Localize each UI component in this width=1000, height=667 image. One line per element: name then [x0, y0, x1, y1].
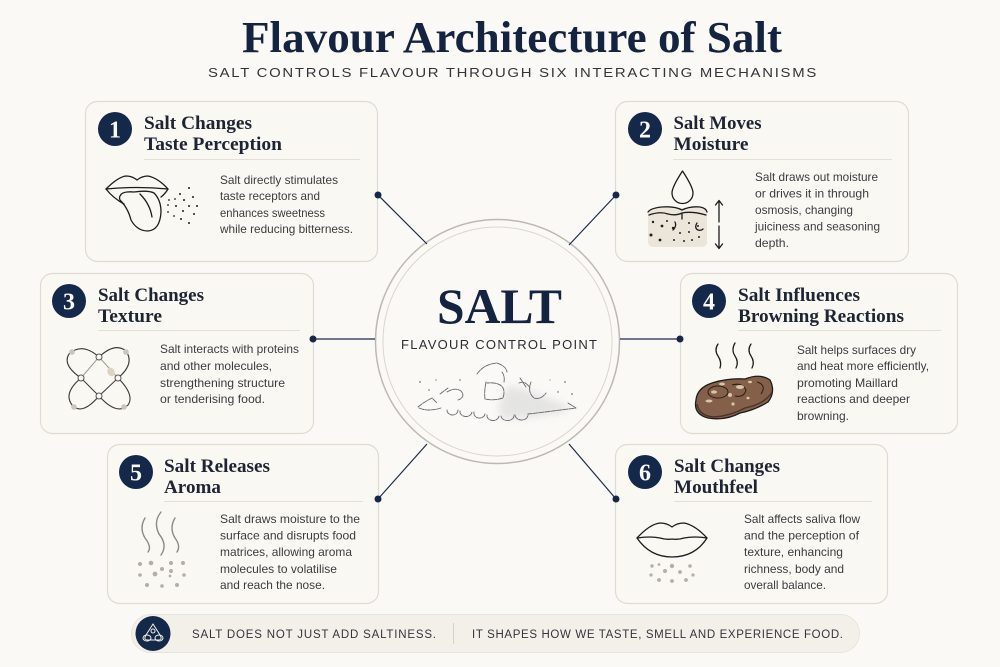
panel: 4 Salt Influences Browning Reactions [680, 274, 958, 434]
heading 1 [144, 114, 283, 155]
icon: protein network [67, 348, 130, 410]
body text 2: or drives it in through [755, 186, 869, 200]
body text 4: Salt helps surfaces dry [797, 343, 916, 357]
body text 4: promoting Maillard [797, 376, 898, 390]
body text 5: surface and disrupts food [220, 528, 356, 542]
body text 2 [754, 170, 880, 250]
body text 1: Salt directly stimulates [220, 173, 338, 187]
body text 5: molecules to volatilise [220, 562, 337, 576]
footer message left: SALT DOES NOT JUST ADD SALTINESS. [192, 629, 436, 641]
body text 3: strengthening structure [160, 376, 285, 390]
body text 6: Salt affects saliva flow [744, 512, 860, 526]
icon: tongue and salt [106, 176, 198, 231]
icon: salt pile [418, 363, 576, 421]
panel: 1 Salt Changes Taste Perception [86, 102, 378, 262]
heading 4: Browning Reactions [738, 307, 904, 327]
number badge 6: 6 [639, 460, 651, 486]
body text 2: osmosis, changing [755, 203, 853, 217]
connector: card 6 to hub [569, 444, 620, 502]
heading 6: Mouthfeel [674, 478, 758, 498]
number badge 2 [628, 112, 662, 146]
body text 2: depth. [755, 236, 789, 250]
number badge 5 [119, 455, 153, 489]
body text 3: and other molecules, [160, 359, 272, 373]
heading 3 [98, 286, 204, 327]
hub heading: SALT [437, 278, 562, 334]
body text 2: Salt draws out moisture [755, 170, 878, 184]
hub caption: FLAVOUR CONTROL POINT [401, 337, 597, 352]
number badge 1: 1 [109, 118, 121, 144]
icon: browned steak with steam [696, 343, 773, 419]
body text 3 [160, 342, 299, 406]
icon: water drop on food block with arrow [648, 171, 722, 248]
connector: card 1 to hub [374, 192, 427, 244]
heading 4 [738, 286, 904, 327]
title: Flavour Architecture of Salt [242, 13, 782, 62]
footer banner [132, 614, 860, 652]
heading 1: Taste Perception [144, 135, 283, 155]
body text 1: while reducing bitterness. [219, 222, 353, 236]
body text 3: Salt interacts with proteins [160, 342, 299, 356]
number badge 4 [692, 284, 726, 318]
heading 3: Salt Changes [98, 286, 204, 306]
body text 6: texture, enhancing [744, 545, 843, 559]
heading 5: Salt Releases [164, 457, 270, 477]
connector: card 3 to hub [310, 336, 375, 342]
heading 1: Salt Changes [144, 114, 252, 134]
number badge 6 [628, 455, 662, 489]
panel: 2 Salt Moves Moisture [616, 102, 908, 262]
body text 3: or tenderising food. [160, 392, 265, 406]
number badge 5: 5 [130, 460, 142, 486]
heading 5: Aroma [164, 478, 221, 498]
panel: 3 Salt Changes Texture [40, 274, 314, 434]
body text 6: richness, body and [744, 562, 844, 576]
connector: card 5 to hub [374, 444, 427, 502]
body text 4 [797, 343, 929, 423]
body text 4: browning. [797, 409, 849, 423]
body text 4: and heat more efficiently, [797, 359, 929, 373]
number badge 1 [98, 112, 132, 146]
body text 6 [744, 512, 860, 592]
number badge 3: 3 [63, 290, 75, 316]
icon: footer molecule badge [136, 616, 170, 651]
panel: 5 Salt Releases Aroma [108, 444, 378, 604]
subtitle: SALT CONTROLS FLAVOUR THROUGH SIX INTERACTING MECHANISMS [208, 65, 818, 80]
number badge 3 [52, 284, 86, 318]
connector: card 4 to hub [620, 336, 684, 342]
icon: lips and particles [637, 523, 707, 583]
connector: card 2 to hub [569, 192, 620, 245]
number badge 4: 4 [703, 290, 715, 316]
panel: central salt hub [376, 220, 620, 464]
heading 2: Moisture [674, 135, 748, 155]
body text 4: reactions and deeper [797, 392, 910, 406]
body text 1: enhances sweetness [220, 206, 325, 220]
body text 6: overall balance. [744, 578, 826, 592]
heading 6 [674, 457, 780, 498]
number badge 2: 2 [639, 118, 651, 144]
body text 6: and the perception of [744, 528, 860, 542]
heading 6: Salt Changes [674, 457, 780, 477]
body text 5: Salt draws moisture to the [220, 512, 360, 526]
panel: 6 Salt Changes Mouthfeel [616, 444, 888, 604]
body text 1 [219, 173, 353, 236]
heading 3: Texture [98, 307, 162, 327]
body text 2: juiciness and seasoning [754, 220, 880, 234]
heading 2 [674, 114, 762, 155]
body text 5: and reach the nose. [220, 578, 325, 592]
body text 5: matrices, allowing aroma [220, 545, 352, 559]
body text 1: taste receptors and [220, 189, 320, 203]
heading 5 [164, 457, 270, 498]
footer message right: IT SHAPES HOW WE TASTE, SMELL AND EXPERIENCE FOOD. [472, 629, 843, 641]
body text 5 [220, 512, 360, 592]
heading 4: Salt Influences [738, 286, 860, 306]
heading 2: Salt Moves [674, 114, 762, 134]
icon: aroma wisps and particles [138, 512, 186, 588]
